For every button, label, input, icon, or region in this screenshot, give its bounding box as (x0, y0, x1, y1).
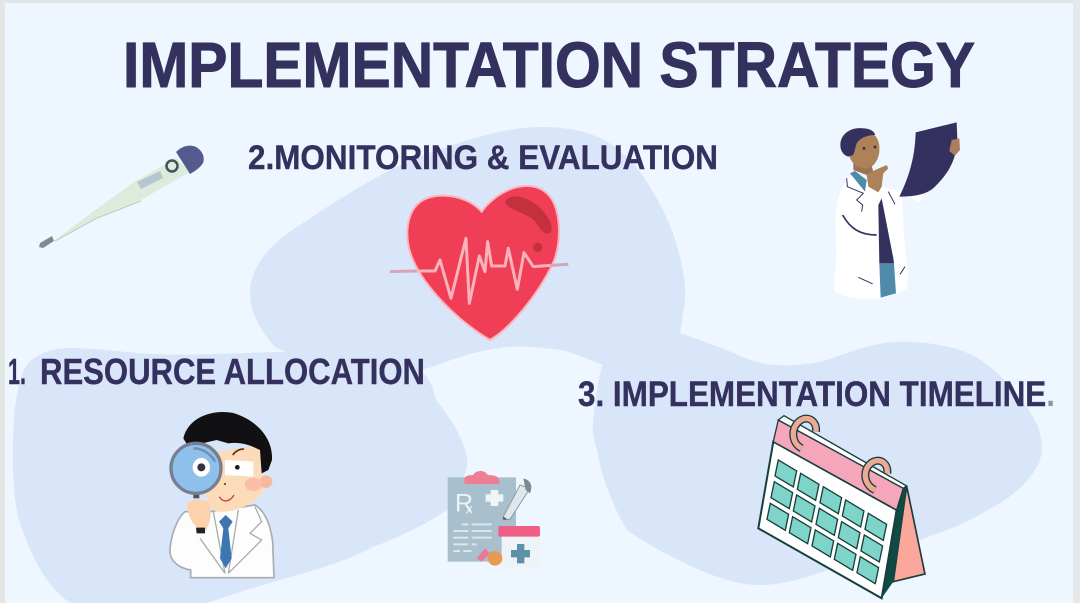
background blob: lower left (13, 348, 467, 603)
icon: prescription clipboard: x (466, 500, 473, 516)
background blob: lower right (593, 333, 1042, 585)
icon: doctor holding x-ray (834, 122, 960, 299)
icon: heart with pulse line (390, 186, 568, 340)
title: IMPLEMENTATION STRATEGY (123, 29, 975, 101)
background blob: top centre (250, 127, 685, 374)
heading: resource allocation: 1. (8, 351, 26, 392)
icon: prescription clipboard (448, 471, 540, 567)
icon: desk calendar (758, 416, 925, 598)
heading: resource allocation: RESOURCE ALLOCATION (40, 351, 425, 392)
heading: monitoring and evaluation: 2.MONITORING & EVALUATION (248, 139, 718, 177)
icon: thermometer (39, 146, 204, 248)
icon: prescription clipboard: R (455, 490, 473, 518)
icon: doctor with magnifying glass (170, 412, 274, 578)
